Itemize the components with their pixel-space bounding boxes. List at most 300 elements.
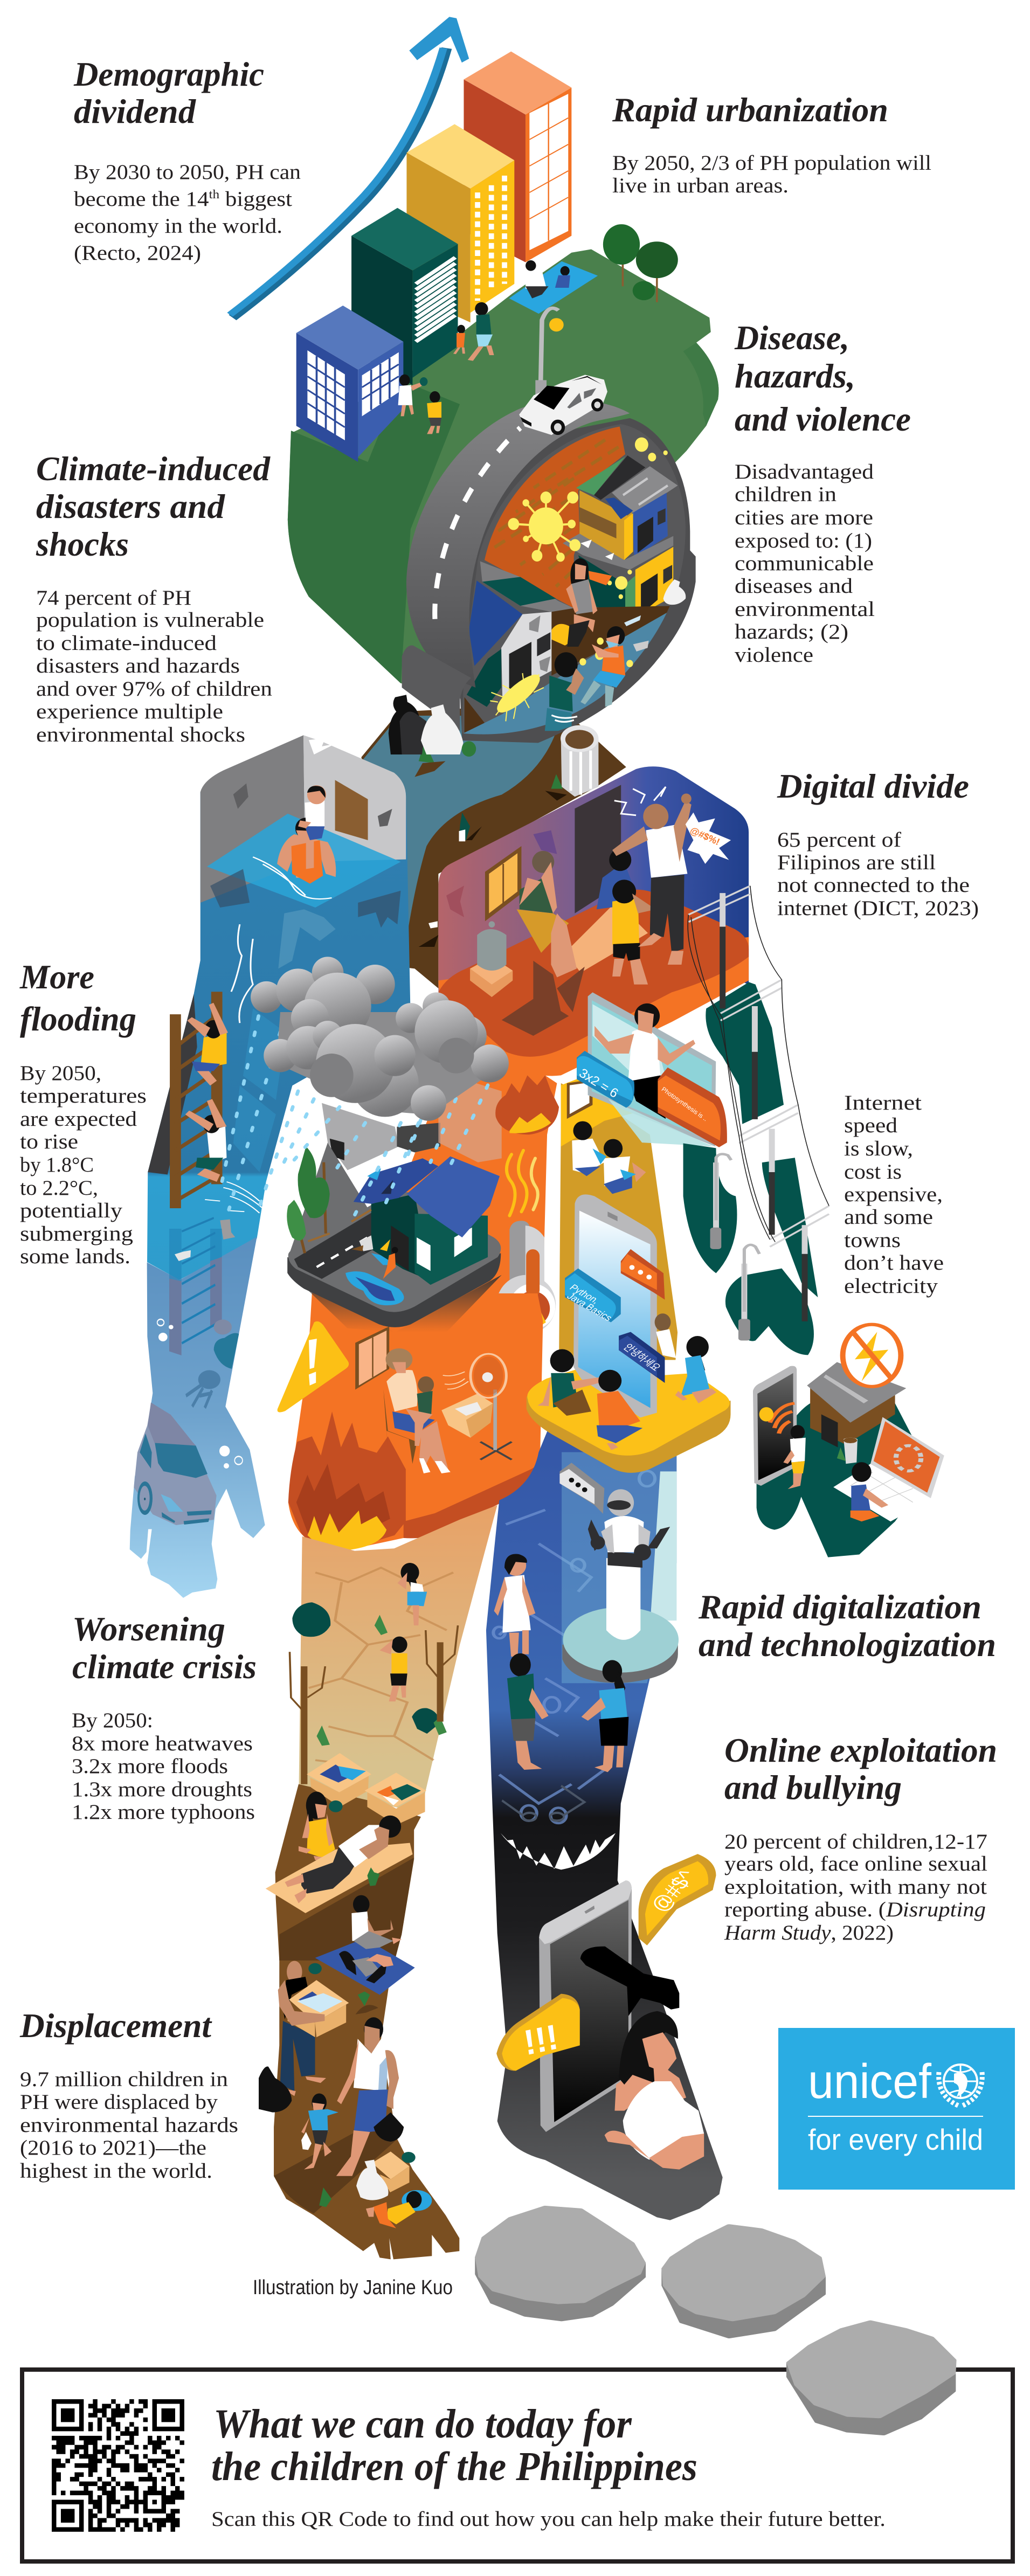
concrete slab — [563, 534, 673, 570]
python bubble: Java Basics — [565, 1291, 615, 1323]
text: Rapid urbanization body: live in urban areas. — [612, 174, 789, 197]
text: More flooding body: some lands. — [20, 1245, 130, 1268]
text: More flooding body: to 2.2°C, — [20, 1176, 98, 1200]
brick wall — [485, 427, 625, 608]
bubble photosynthesis: Photosynthesis is .. — [660, 1086, 709, 1123]
python bubble: Python, — [567, 1283, 602, 1305]
heading: Rapid digitalization and technologization: and technologization — [699, 1626, 996, 1664]
cta text: Scan this QR Code to find out how you can help make their future better. — [211, 2508, 886, 2531]
heading: Digital divide: Digital divide — [777, 767, 969, 805]
shoulder wall left — [201, 735, 305, 903]
thermometer — [496, 1221, 556, 1334]
panel: hand holding devices — [753, 1325, 944, 1557]
road dashes — [435, 428, 520, 619]
right slope fold — [683, 343, 718, 426]
platform side — [287, 1253, 501, 1327]
korean bubble: 안녕하세요 — [621, 1342, 663, 1373]
ground — [551, 606, 679, 676]
bubble photosynthesis — [658, 1068, 727, 1147]
yellow bubble exclamation — [496, 1994, 580, 2071]
plant — [367, 1867, 379, 1886]
text: Disease body: Disadvantaged — [735, 460, 874, 483]
father with child — [336, 2017, 399, 2176]
panel: stepping stones — [478, 2207, 823, 2337]
floating item — [220, 1220, 235, 1239]
heading: Worsening climate crisis — [72, 1610, 257, 1686]
table and chair under water — [210, 869, 400, 927]
girl left — [537, 1349, 600, 1416]
roofs right — [576, 456, 625, 495]
text: Online exploitation body — [724, 1830, 987, 1944]
rim — [460, 418, 696, 743]
darker ground — [279, 1858, 414, 1986]
heading: Rapid urbanization: Rapid urbanization — [612, 91, 888, 129]
phone body — [573, 1194, 657, 1417]
road band — [406, 400, 630, 688]
trees — [287, 1146, 330, 1253]
chair broken — [502, 961, 585, 1036]
cta heading — [211, 2401, 697, 2489]
green wall — [625, 576, 635, 615]
panel: brown leg with displaced families — [259, 1753, 459, 2259]
white trash bag — [421, 704, 464, 754]
trash can — [844, 1438, 858, 1464]
panel: abdomen orange with mother and fire — [278, 1293, 543, 1550]
text: Worsening climate crisis body: 3.2x more floods — [72, 1755, 228, 1778]
text: Rapid urbanization body: By 2050, 2/3 of PH population will — [612, 151, 931, 175]
virus dots — [579, 438, 668, 667]
text: Internet speed note: don’t have — [844, 1251, 944, 1275]
girl sitting — [566, 558, 612, 632]
dead trees — [289, 1625, 458, 1784]
window — [485, 846, 521, 921]
panel: left leg cracked earth — [289, 1505, 497, 1813]
robot — [588, 1489, 670, 1640]
picnic blanket with mother and child — [509, 260, 598, 314]
logo: UNICEF: for every child — [808, 2123, 983, 2156]
text: More flooding body — [20, 1062, 147, 1268]
trees — [603, 224, 678, 302]
anger bubble: @#$%! — [688, 825, 722, 847]
tablet and teacher — [588, 992, 716, 1146]
bubble 3x2 — [577, 1051, 634, 1108]
heading: Disease, hazards, and violence: Disease, — [734, 319, 849, 357]
submerged ladder — [169, 1218, 222, 1355]
small plants — [316, 1615, 447, 1746]
yellow tower — [406, 124, 514, 322]
text: Demographic dividend body: th — [209, 188, 220, 201]
text: Internet speed note: Internet — [844, 1091, 922, 1114]
trash can on road — [360, 1235, 373, 1251]
window — [355, 1326, 389, 1389]
circuit traces — [493, 1471, 655, 1823]
teal roof — [482, 577, 556, 606]
child on shoulders — [305, 801, 324, 826]
no electricity sign — [843, 1325, 901, 1387]
floor top — [438, 890, 749, 1057]
shoulder wall right — [303, 735, 406, 862]
ghost building orange — [438, 1071, 502, 1162]
stains — [233, 784, 392, 827]
yellow part — [561, 1075, 634, 1146]
yellow house — [579, 490, 633, 560]
box and bag on foot — [356, 2151, 409, 2200]
boy walking — [379, 1637, 407, 1701]
woman in yellow — [299, 1792, 335, 1862]
yellow house lower — [635, 547, 673, 615]
qr code — [52, 2399, 184, 2532]
plant with dirt — [356, 2005, 378, 2014]
flood ripple lines — [205, 1182, 263, 1213]
warning sign — [278, 1321, 349, 1412]
text: Digital divide body: internet (DICT, 2023) — [777, 897, 979, 920]
credit: illustrator: Illustration by Janine Kuo — [253, 2276, 453, 2299]
heading: Online exploitation and bullying — [724, 1732, 997, 1806]
underside band — [404, 1464, 540, 1538]
text: More flooding body: submerging — [20, 1222, 133, 1245]
text: Disease body — [735, 460, 875, 667]
stool — [186, 1385, 212, 1408]
panel: call to action box — [22, 2370, 1013, 2561]
gold column — [559, 1083, 678, 1360]
laptop — [833, 1417, 944, 1521]
panel: torso brown ground — [361, 704, 626, 988]
crying girl — [605, 2011, 704, 2170]
panel: monster, phone and crying girl — [496, 1786, 704, 2170]
stone 2 — [664, 2226, 823, 2337]
panel: yellow platform with children — [527, 1369, 731, 1473]
window — [567, 1079, 592, 1119]
text: More flooding body: potentially — [20, 1199, 123, 1222]
small bush on foot — [402, 2152, 416, 2163]
puddle — [345, 1271, 404, 1305]
girl in white dress — [494, 1554, 535, 1657]
text: Internet speed note: is slow, — [844, 1137, 913, 1160]
yellow bubble symbols: @#$^ — [646, 1867, 701, 1915]
plant on foot — [319, 2187, 331, 2207]
crack in wall — [309, 738, 335, 754]
boy center — [597, 1370, 642, 1450]
left cloud — [251, 957, 395, 1040]
two students reading — [572, 1121, 646, 1194]
text: Internet speed note — [844, 1091, 944, 1298]
small debris — [459, 813, 470, 840]
interior scene — [460, 420, 690, 747]
sleeping child on pillow — [366, 2190, 432, 2228]
windows under rain — [233, 1008, 286, 1172]
text: More flooding body: By 2050, — [20, 1062, 101, 1085]
heat waves — [507, 1151, 538, 1216]
ladder — [175, 992, 217, 1208]
panel: right leg, digital then dark — [486, 1428, 723, 2220]
car — [519, 375, 607, 435]
heading: Online exploitation and bullying: and bullying — [724, 1769, 902, 1806]
disc — [562, 1640, 678, 1683]
text: Worsening climate crisis body: 1.3x more droughts — [72, 1778, 252, 1801]
child climbing ladder 1 — [187, 1003, 228, 1085]
heading: More flooding — [19, 958, 136, 1038]
text: Digital divide body: not connected to the — [777, 874, 970, 897]
room wall — [438, 766, 749, 992]
panel: gold torso with students — [559, 992, 727, 1360]
text: Displacement body: highest in the world. — [20, 2159, 212, 2183]
panel: lower arm and hand with submerged car — [130, 1218, 265, 1598]
text: Climate-induced body: experience multiple — [36, 700, 223, 723]
text: Climate-induced body: population is vulnerable — [36, 608, 264, 632]
text: Disease body: diseases and — [735, 574, 853, 598]
text: Disease body: communicable — [735, 552, 874, 575]
heading: Worsening climate crisis: Worsening — [72, 1610, 225, 1648]
heading: Demographic dividend: Demographic — [73, 56, 264, 93]
text: Displacement body: (2016 to 2021)—the — [20, 2136, 206, 2159]
boy rear — [655, 1313, 676, 1358]
right cloud — [396, 992, 509, 1083]
green tower — [351, 208, 458, 385]
girl in blue — [582, 1660, 628, 1772]
dark wedge — [148, 994, 197, 1175]
text: Climate-induced body: disasters and hazards — [36, 654, 240, 677]
anger bubble — [686, 813, 731, 864]
circuit eyes on dark — [502, 1786, 584, 1820]
ghost building grey — [322, 1103, 399, 1170]
text: Worsening climate crisis body: By 2050: — [72, 1709, 153, 1732]
text: Disease body: violence — [735, 643, 813, 667]
child with umbrella — [380, 1239, 390, 1251]
text: Online exploitation body: exploitation, with many not — [724, 1875, 987, 1899]
big flame — [288, 1411, 406, 1550]
heading: Climate-induced disasters and shocks — [36, 450, 271, 563]
bacteria — [490, 670, 544, 721]
text: Climate-induced body — [36, 586, 272, 746]
text: Demographic dividend body: economy in the world. — [74, 214, 282, 238]
father — [277, 834, 336, 878]
text: Worsening climate crisis body — [72, 1709, 255, 1824]
text: Displacement body: 9.7 million children in — [20, 2068, 228, 2091]
black trash bag — [259, 2066, 292, 2113]
panel: phone on platform — [565, 1194, 665, 1417]
flood surface in room — [207, 814, 400, 908]
cloud base — [276, 1012, 494, 1115]
robot hologram beam — [651, 1471, 676, 1621]
yellow bubble exclamation: !!! — [521, 2017, 561, 2063]
text: More flooding body: by 1.8°C — [20, 1153, 94, 1176]
logo: UNICEF — [778, 2028, 1015, 2190]
white bag — [663, 579, 686, 605]
text: Displacement body: PH were displaced by — [20, 2090, 218, 2114]
child at laptop — [851, 1462, 888, 1521]
text: More flooding body: temperatures — [20, 1084, 147, 1107]
cardboard boxes — [307, 1753, 426, 1825]
dark phone — [539, 1880, 632, 2132]
panel: clouds and rain — [221, 957, 509, 1222]
panel: digital divide room — [438, 766, 749, 1076]
text: Online exploitation body: reporting abuse. ( Disrupting — [724, 1898, 986, 1921]
text: Internet speed note: electricity — [844, 1275, 938, 1298]
pile bush — [419, 742, 434, 763]
dark green bushes — [292, 1602, 330, 1637]
lighter column — [562, 1452, 676, 1683]
boy in yellow — [612, 880, 656, 985]
heading: Displacement: Displacement — [19, 2007, 213, 2045]
black trash bags — [389, 695, 426, 754]
rain columns — [221, 1016, 488, 1222]
cardboard box — [441, 1394, 493, 1438]
family walking — [453, 302, 494, 361]
electric fan — [471, 1354, 511, 1460]
icon: trash can by neck — [561, 725, 598, 797]
rug — [565, 902, 648, 973]
text: Displacement body — [20, 2068, 238, 2183]
boy from behind — [545, 652, 584, 731]
text: More flooding body: are expected — [20, 1107, 137, 1131]
grey speech bubble — [559, 1463, 604, 1514]
korean bubble — [619, 1332, 665, 1383]
shaded underside — [292, 1275, 502, 1332]
small bush — [308, 1963, 322, 1974]
woman crying — [517, 851, 577, 978]
monster mouth — [501, 1833, 616, 1869]
cracks — [309, 1568, 453, 1765]
street lamp — [535, 308, 564, 394]
panel: flooded room family — [277, 785, 336, 968]
street lamps — [710, 1154, 759, 1341]
blue torn roof — [354, 1158, 438, 1204]
grey slab — [480, 561, 574, 612]
heading: More flooding: More — [19, 958, 94, 996]
ground back — [288, 1142, 371, 1257]
text: Demographic dividend body: (Recto, 2024) — [74, 241, 201, 265]
python bubble — [565, 1269, 621, 1323]
stains — [446, 885, 464, 917]
shrub — [462, 741, 476, 757]
heading: Disease, hazards, and violence: and violence — [735, 400, 911, 438]
floating bottle and can — [624, 615, 641, 626]
platform top — [288, 1192, 501, 1312]
man with box — [278, 1961, 349, 2096]
heading: Climate-induced disasters and shocks: shocks — [36, 525, 129, 563]
panel: arm with flooding — [147, 735, 411, 1280]
submerged tire and bush — [214, 1319, 239, 1369]
heading: Disease, hazards, and violence: hazards, — [735, 357, 855, 395]
brown hut — [807, 1362, 906, 1448]
girl right — [675, 1336, 716, 1403]
blue house — [632, 493, 668, 558]
orange chat bubble — [621, 1249, 665, 1300]
text: Disease body: cities are more — [735, 506, 873, 529]
text: Disease body: hazards; (2) — [735, 620, 848, 643]
text: Climate-induced body: 74 percent of PH — [36, 586, 191, 610]
fallen tree branch — [308, 1210, 371, 1241]
door — [335, 780, 368, 840]
orange tower — [464, 52, 571, 262]
text: Displacement body: environmental hazards — [20, 2114, 238, 2137]
heading: More flooding: flooding — [20, 1000, 136, 1038]
text: Online exploitation body: Harm Study , 2022) — [724, 1921, 894, 1944]
flame — [495, 1075, 559, 1134]
panel: road ring with city interior — [389, 375, 696, 757]
panel: children around phone — [537, 1313, 716, 1450]
front cloud — [264, 1021, 446, 1121]
yellow bubble symbols — [639, 1854, 716, 1945]
text: More flooding body: to rise — [20, 1130, 78, 1153]
text: Internet speed note: towns — [844, 1229, 901, 1252]
panel: buildings — [296, 52, 678, 462]
panel: house platform in storm — [287, 1142, 502, 1332]
lying man — [285, 1816, 401, 1903]
stone 3 over the box border — [789, 2322, 953, 2434]
text: Disease body: children in — [735, 483, 837, 506]
panel: head ground — [288, 250, 718, 693]
text: Internet speed note: and some — [844, 1206, 933, 1229]
text: Climate-induced body: environmental shocks — [36, 723, 245, 746]
door — [575, 785, 621, 913]
text: Climate-induced body: and over 97% of children — [36, 677, 272, 701]
heading: Demographic dividend: dividend — [74, 93, 197, 130]
floodwater — [464, 545, 690, 747]
heading: Climate-induced disasters and shocks: disasters and — [36, 488, 226, 525]
text: Disease body: exposed to: (1) — [735, 529, 872, 552]
wave lines — [231, 857, 331, 1023]
sleeping child — [551, 620, 590, 647]
text: Demographic dividend body: biggest — [219, 188, 292, 211]
yellow flame — [307, 1511, 386, 1550]
text: Demographic dividend body: By 2030 to 2050, PH can — [74, 161, 301, 184]
water jug on box — [470, 921, 513, 997]
text: Digital divide body: 65 percent of — [777, 828, 901, 851]
floating can — [175, 1250, 191, 1261]
black bag by man — [374, 2113, 404, 2142]
panel: orange torso — [308, 1036, 559, 1360]
house walls — [371, 1194, 431, 1281]
bubbles — [157, 1319, 243, 1469]
text: Worsening climate crisis body: 1.2x more typhoons — [72, 1801, 255, 1824]
shadow arm from phone — [580, 1947, 679, 2016]
floor base — [438, 937, 749, 1076]
boy at phone — [783, 1425, 806, 1489]
cardboard bed — [266, 1843, 413, 1913]
boy with mask — [580, 626, 625, 707]
logo: UNICEF: unicef — [808, 2055, 932, 2109]
darker left side — [288, 380, 460, 683]
text: Internet speed note: expensive, — [844, 1183, 943, 1206]
water stream on neck — [363, 716, 561, 943]
text: Digital divide body: Filipinos are still — [777, 851, 936, 874]
white brick house — [501, 612, 551, 697]
cta heading: What we can do today for — [213, 2401, 632, 2447]
text: Rapid urbanization body — [612, 151, 931, 197]
large virus — [509, 492, 580, 561]
text: Demographic dividend body: become the 14 — [74, 188, 196, 211]
heading: Online exploitation and bullying: Online exploitation — [724, 1732, 997, 1769]
text: Internet speed note: cost is — [844, 1160, 902, 1183]
car — [134, 1402, 217, 1525]
heading: Disease, hazards, and violence — [734, 319, 911, 438]
emblem — [939, 2065, 982, 2106]
lightning scribbles — [614, 787, 666, 815]
bubble 3x2: 3x2 = 6 — [577, 1066, 621, 1101]
text: Digital divide body — [777, 828, 979, 920]
dark teal wall — [578, 555, 625, 613]
text: Climate-induced body: to climate-induced — [36, 632, 217, 655]
angry father — [612, 793, 692, 965]
heading: Climate-induced disasters and shocks: Climate-induced — [36, 450, 271, 488]
boy in green — [507, 1653, 549, 1770]
blue tower — [296, 306, 403, 462]
heading: Demographic dividend — [73, 56, 264, 130]
text: Online exploitation body: years old, face online sexual — [724, 1852, 987, 1875]
mother with child — [597, 862, 636, 909]
icon: rising arrow — [230, 17, 469, 317]
